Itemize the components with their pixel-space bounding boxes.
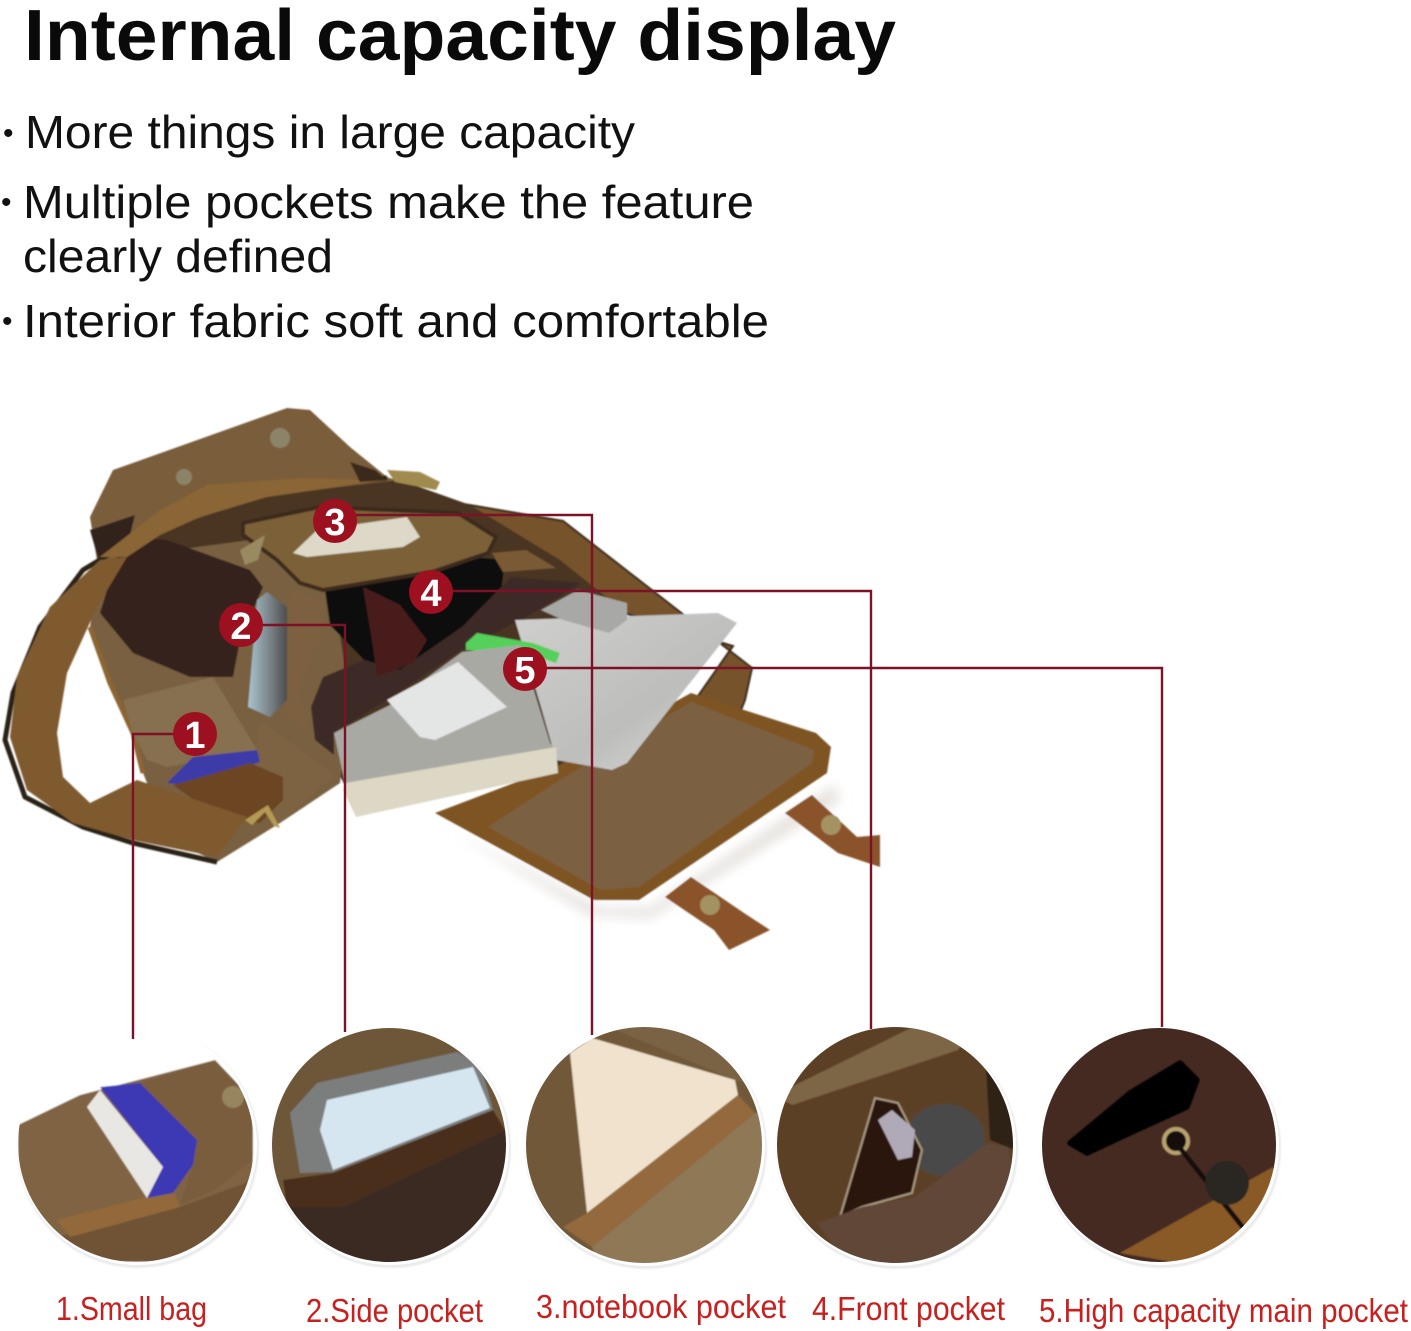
right shoulder strap <box>458 503 752 730</box>
marker 4 <box>409 570 453 615</box>
pocket captions: 1.Small bag <box>56 1290 207 1327</box>
green pen <box>466 633 560 663</box>
strap buckle <box>245 462 440 828</box>
open flap <box>435 693 831 900</box>
tan inner lining <box>492 550 556 572</box>
lining cloth <box>311 577 582 755</box>
pocket captions <box>56 1288 1408 1329</box>
circle photo 2: side pocket <box>270 1026 511 1270</box>
notebook in pocket <box>293 517 420 557</box>
lower body tone <box>250 720 335 823</box>
cast shadow <box>450 785 840 918</box>
left shoulder strap <box>5 478 387 862</box>
feature list: • <box>2 305 13 338</box>
watch <box>541 590 627 633</box>
marker 4: 4 <box>420 573 442 615</box>
zip pull <box>240 535 265 565</box>
notebook pages <box>343 747 558 817</box>
marker 2 <box>219 603 263 648</box>
pocket captions: 3.notebook pocket <box>536 1288 786 1325</box>
circle photo 1: small bag <box>17 1054 259 1268</box>
pocket captions: 2.Side pocket <box>306 1292 483 1329</box>
notebook cover <box>334 645 556 783</box>
feature list: Multiple pockets make the feature <box>23 176 754 228</box>
leader lines <box>133 515 1162 1039</box>
circle photo 3: notebook pocket <box>525 1020 770 1269</box>
marker 1: 1 <box>184 715 206 757</box>
marker 1 <box>173 712 217 757</box>
small pocket <box>123 677 257 767</box>
marker 5: 5 <box>514 650 536 692</box>
marker 2: 2 <box>230 606 252 648</box>
bag photo <box>5 408 880 950</box>
phone <box>387 662 507 740</box>
circle photo 4: front pocket <box>775 1026 1018 1269</box>
front zip pocket <box>243 507 496 590</box>
number markers <box>173 499 547 757</box>
tablet <box>515 613 737 770</box>
feature list: • <box>1 186 12 219</box>
inner backing <box>133 480 610 795</box>
feature list: Interior fabric soft and comfortable <box>23 295 769 347</box>
snap buttons <box>176 428 290 485</box>
tissue in pocket <box>167 750 260 785</box>
small pocket flap <box>173 763 283 823</box>
marker 3 <box>313 499 357 544</box>
body piping <box>90 627 143 773</box>
feature list: clearly defined <box>23 230 333 282</box>
feature list: • <box>3 117 14 150</box>
side pocket device <box>248 592 287 717</box>
main body <box>90 540 350 862</box>
sunglasses <box>363 587 427 677</box>
marker 3: 3 <box>324 502 346 544</box>
feature list <box>1 106 769 347</box>
feature list: More things in large capacity <box>25 106 635 158</box>
marker 5 <box>503 647 547 692</box>
black cavity <box>325 555 505 670</box>
bag side dark band <box>90 515 135 558</box>
pocket captions: 4.Front pocket <box>812 1290 1005 1327</box>
mesh pocket <box>100 537 263 677</box>
flap strap right <box>785 795 880 867</box>
flap strap bottom <box>665 877 770 950</box>
top flap <box>90 408 470 560</box>
body tan patch <box>285 590 325 740</box>
circle photo 5: main pocket <box>1039 1026 1281 1268</box>
